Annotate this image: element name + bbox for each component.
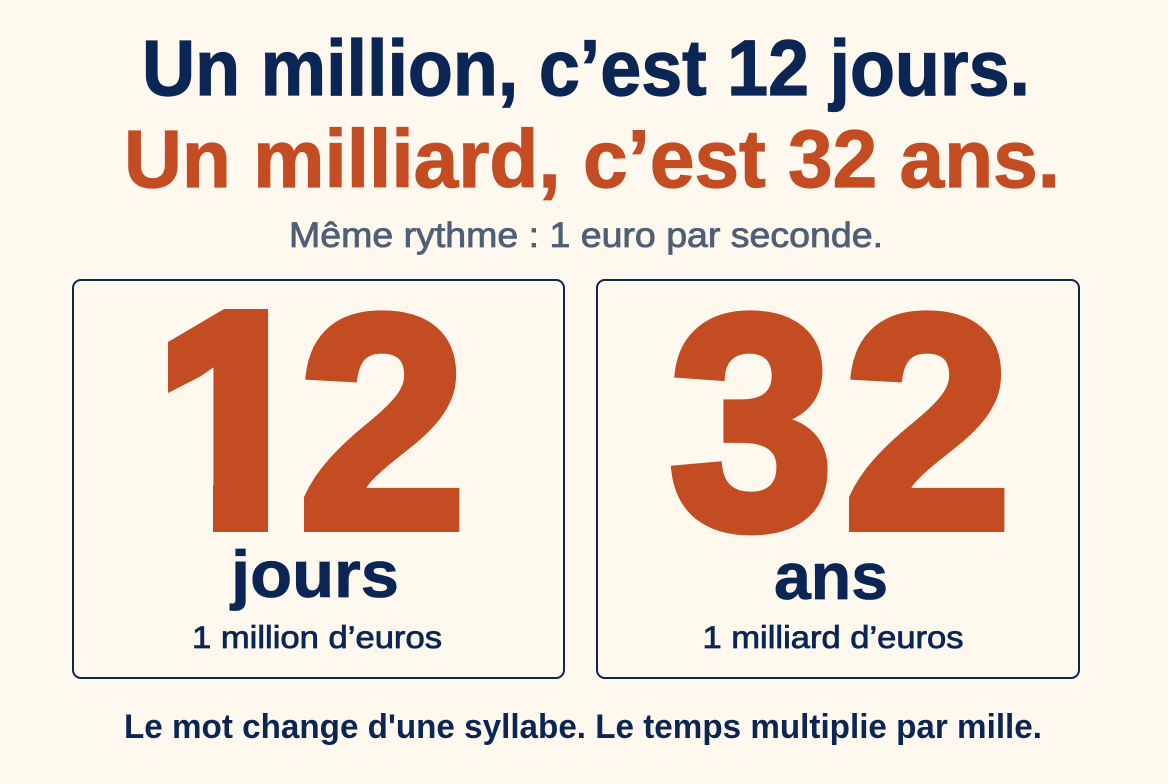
panel frame left	[73, 280, 564, 678]
title line 1: Un million, c’est 12 jours.	[142, 23, 1030, 112]
footer message: Le mot change d'une syllabe. Le temps multiplie par mille.	[124, 708, 1042, 746]
big digit 3: 3	[669, 254, 833, 592]
caption: 1 million d'euros: 1 million d’euros	[192, 619, 442, 655]
subtitle: Même rythme : 1 euro par seconde.	[289, 216, 883, 255]
caption: 1 milliard d'euros: 1 milliard d’euros	[702, 619, 964, 655]
big digit 2: 2	[844, 254, 1012, 592]
title line 2: Un milliard, c’est 32 ans.	[124, 114, 1060, 205]
unit: jours: jours	[229, 537, 399, 611]
big digit 1: 1	[157, 245, 313, 593]
panel: 32 ans	[597, 254, 1079, 678]
panel: 12 jours	[73, 245, 564, 678]
panel frame right	[597, 280, 1079, 678]
big digit 2: 2	[298, 254, 466, 592]
unit: ans: ans	[774, 539, 888, 613]
